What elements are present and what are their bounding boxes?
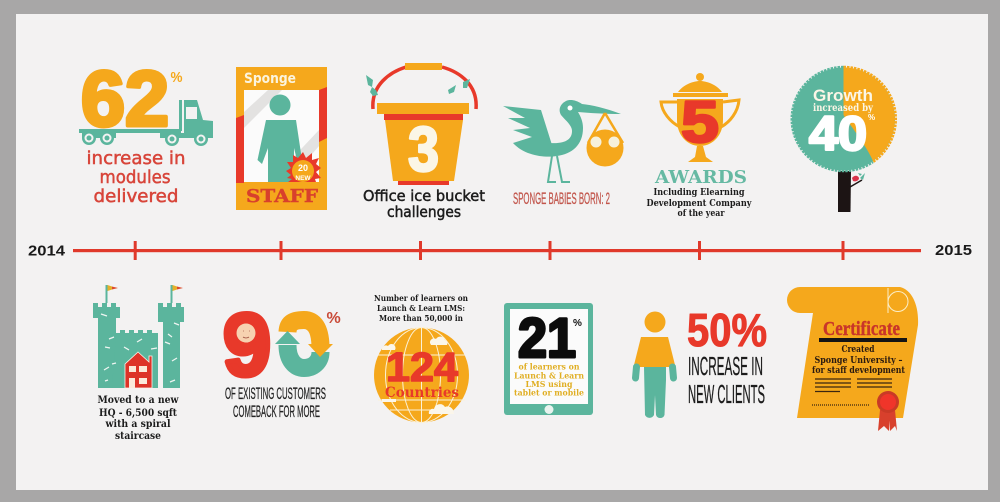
caption: existing customers [225, 384, 326, 421]
caption: increase in modules delivered: modules [100, 167, 170, 188]
caption: awards detail [646, 187, 752, 219]
panel: ice bucket [363, 63, 485, 221]
caption: moved to new HQ: staircase [115, 431, 161, 442]
panel: stork [503, 100, 624, 208]
caption: number of learners: Number of learners on [374, 294, 468, 304]
caption: increase in new clients [688, 351, 765, 409]
caption: awards detail: Development Company [646, 198, 752, 209]
starburst: 20 new [286, 152, 321, 182]
caption: tablet or mobile [514, 362, 585, 398]
panel: tablet [504, 303, 593, 415]
panel: 62% modules: % [170, 69, 182, 86]
caption: tablet or mobile: tablet or mobile [514, 388, 585, 398]
caption: moved to new HQ: HQ - 6,500 sqft [99, 408, 177, 419]
caption: office ice bucket challenges [363, 187, 485, 221]
caption: tablet or mobile: Launch & Learn [514, 372, 584, 382]
panel: new clients [634, 304, 767, 418]
panel: 90% customers: % [326, 310, 341, 327]
tree canopy [792, 67, 896, 171]
panel: castle [93, 285, 184, 442]
panel: countries globe [374, 294, 469, 422]
caption: increase in modules delivered [86, 148, 186, 207]
text: INCREASE IN [688, 351, 763, 381]
timeline: 2015 [935, 243, 972, 259]
caption: number of learners: More than 50,000 in [379, 314, 463, 324]
caption: sponge university [812, 345, 906, 376]
caption: number of learners: Launch & Learn LMS: [377, 304, 465, 314]
caption: tablet or mobile: of learners on [518, 362, 580, 372]
tree canopy: 40 [809, 108, 867, 161]
panel: growth tree [792, 67, 896, 212]
tree canopy: increased by [813, 103, 874, 114]
icon: globe [374, 328, 469, 422]
icon: baby bag [586, 113, 624, 166]
number 124 countries: Countries [385, 385, 459, 401]
number 50%: 50% [687, 304, 767, 356]
big number 62: 62 [81, 54, 169, 142]
starburst: 20 new: NEW [295, 175, 311, 182]
caption: sponge university: for staff development [812, 366, 906, 376]
caption: office ice bucket challenges: Office ice bucket [363, 187, 485, 205]
caption: sponge university: Sponge University – [814, 356, 903, 366]
icon: ribbon seal [877, 391, 899, 431]
caption: increase in modules delivered: increase in [86, 148, 186, 169]
caption: moved to new HQ [98, 395, 179, 442]
caption: sponge university: Created [842, 345, 875, 355]
icon: person [258, 94, 302, 182]
panel: 90% customers: OF EXISTING CUSTOMERS [225, 384, 326, 403]
caption: number of learners [374, 294, 468, 324]
panel: 62% modules [79, 54, 213, 207]
number 9 with face: 9 [223, 295, 271, 394]
panel: tablet: % [573, 318, 582, 329]
timeline: 2014 [28, 244, 65, 260]
caption: awards detail: Including Elearning [654, 187, 745, 198]
starburst: 20 new: 20 [298, 163, 308, 173]
timeline [28, 241, 972, 260]
icon: trophy: 5 [681, 90, 719, 155]
icon: truck [79, 100, 213, 146]
caption: awards detail: of the year [678, 208, 725, 219]
heading: Certificate: Certificate [823, 318, 900, 340]
caption: tablet or mobile: LMS using [526, 380, 573, 390]
panel: staff poster [236, 67, 327, 210]
number 21: 21 [518, 306, 576, 369]
icon: stork [503, 100, 621, 182]
tree canopy: Growth [813, 86, 873, 105]
icon: trophy [661, 73, 739, 162]
text: NEW CLIENTS [688, 379, 765, 409]
number 3: 3 [408, 115, 439, 185]
label: STAFF: STAFF [246, 186, 318, 207]
icon: castle [93, 285, 184, 388]
icon: red house [125, 352, 152, 388]
caption: moved to new HQ: Moved to a new [98, 395, 179, 406]
tree canopy: % [868, 113, 875, 122]
panel: certificate [787, 287, 918, 431]
caption: increase in modules delivered: delivered [94, 186, 178, 207]
icon: person [634, 312, 676, 418]
icon: circular arrows zero [275, 320, 333, 368]
panel: stork: SPONGE BABIES BORN: 2 [513, 189, 610, 208]
number 124 countries: 124 [386, 344, 458, 390]
panel: awards [646, 73, 752, 219]
heading: Sponge: Sponge [244, 71, 296, 87]
icon: scroll [787, 287, 918, 418]
panel: 90% customers [223, 295, 341, 421]
caption: moved to new HQ: with a spiral [105, 419, 171, 430]
panel: 90% customers: COMEBACK FOR MORE [233, 402, 320, 421]
label: AWARDS: AWARDS [654, 167, 747, 188]
caption: office ice bucket challenges: challenges [387, 203, 461, 221]
icon: trunk and bird [838, 171, 865, 212]
